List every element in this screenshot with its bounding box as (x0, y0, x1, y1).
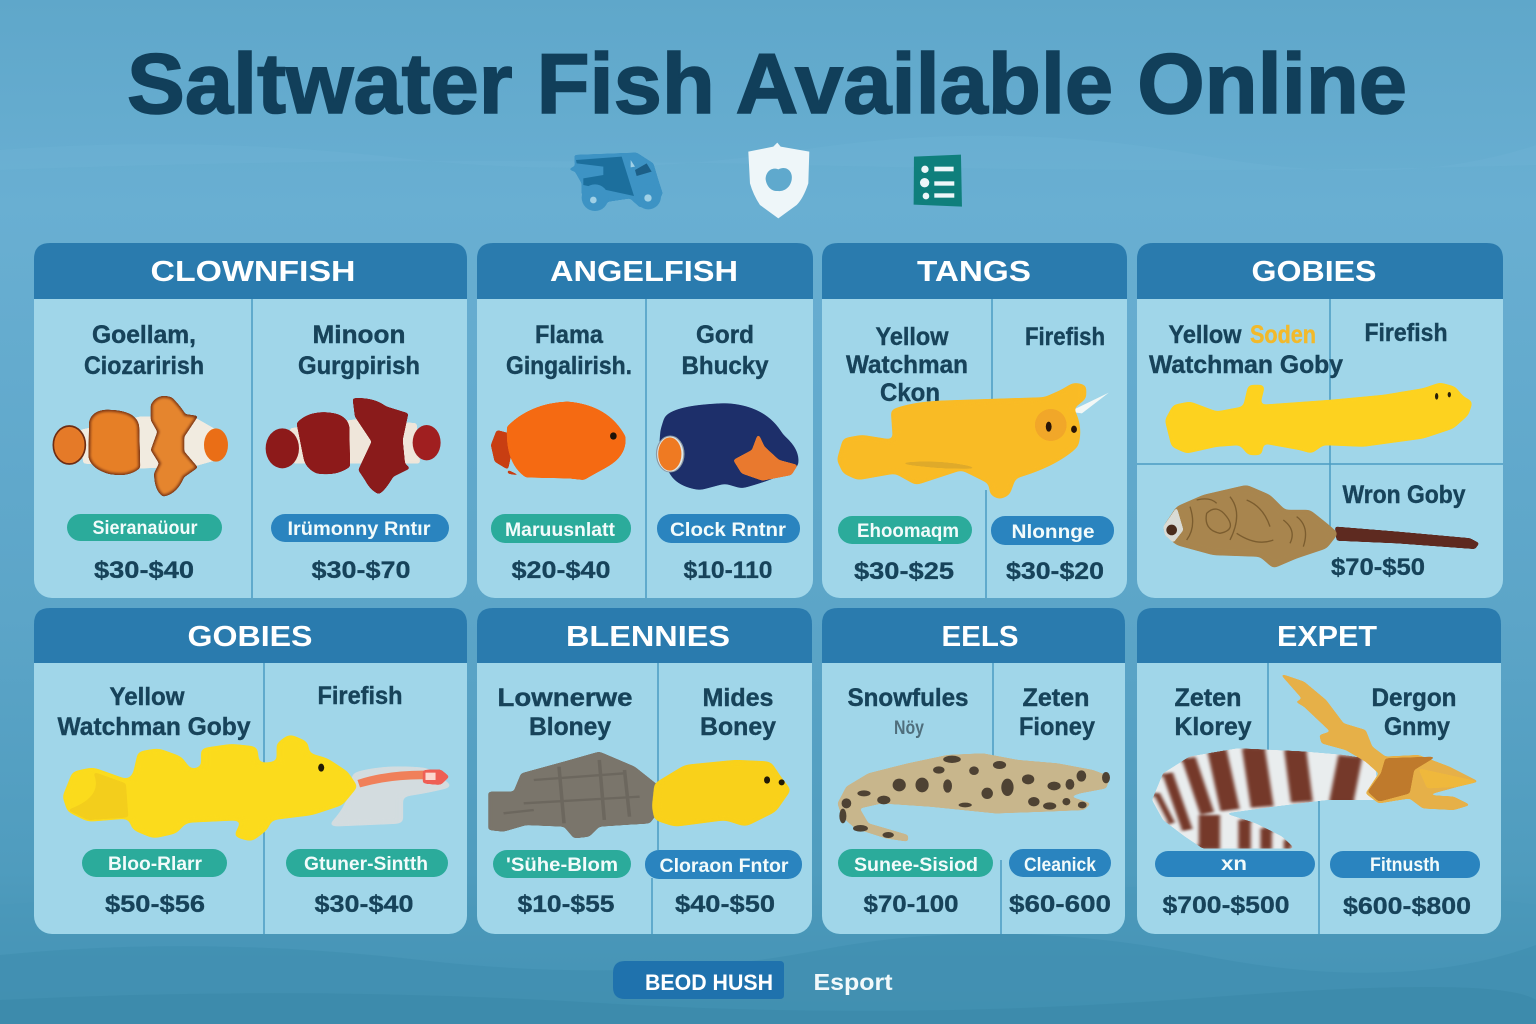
species name: right: Gord (696, 321, 754, 349)
heading: expet: EXPET (1277, 621, 1377, 653)
price: left: $50-$56 (105, 891, 205, 918)
badge: right (1330, 851, 1480, 878)
fish: brown goby (1163, 485, 1479, 568)
badge: left: Sunee-Sisiod (854, 855, 978, 876)
badge: right: Cleanick (1024, 855, 1096, 876)
fish: yellow tang (837, 383, 1109, 499)
price: left: $70-100 (864, 891, 958, 918)
fish: orange clownfish (53, 397, 228, 496)
species name: left: Klorey (1174, 713, 1252, 741)
species name: left (58, 683, 251, 741)
species name: right (700, 684, 776, 741)
species name: left: Zeten (1174, 684, 1242, 712)
heading: angelfish: ANGELFISH (550, 256, 738, 288)
icon: shield with heart (748, 143, 809, 218)
badge: left: xn (1221, 854, 1247, 875)
heading: tangs: TANGS (917, 256, 1031, 288)
species name: left (498, 684, 633, 741)
badge: right (645, 850, 802, 879)
species name: right (1019, 684, 1095, 741)
species name: right: Bhucky (682, 352, 769, 380)
badge: right (286, 849, 448, 877)
species name: left: Flama (535, 321, 604, 349)
panel: gobies top (1137, 243, 1503, 598)
species name: left (848, 684, 968, 739)
species name: left: Gingalirish. (506, 352, 632, 380)
price: right: $40-$50 (675, 891, 775, 918)
species name: right: Boney (700, 713, 776, 741)
species name: yellow watchman goby (1149, 321, 1343, 379)
species name: left: Nöy (894, 718, 924, 739)
badge: right: Cloraon Fntor (660, 856, 789, 877)
heading: gobies: GOBIES (1252, 256, 1376, 288)
icon: delivery truck (568, 153, 663, 211)
species name: right: Fioney (1019, 713, 1095, 741)
species name: right: Mides (702, 684, 774, 712)
species name: right: Zeten (1022, 684, 1090, 712)
species name: right (682, 321, 769, 380)
panel: eels (822, 608, 1125, 934)
heading: blennies: BLENNIES (566, 621, 730, 653)
badge: right (657, 514, 800, 543)
badge: left (67, 514, 222, 541)
fish: navy angelfish (657, 403, 798, 490)
species name: left (506, 321, 632, 380)
badge: right: Clock Rntnr (670, 520, 787, 541)
goby eyes (1435, 392, 1451, 400)
species name: left: Watchman Goby (58, 713, 251, 741)
panel: angelfish (477, 243, 813, 598)
badge: right (1009, 849, 1111, 877)
badge: left: Bloo-Rlarr (108, 854, 203, 875)
fish: zebra eel with dragon head (1152, 673, 1479, 848)
species name: wron goby: Wron Goby (1342, 481, 1466, 509)
price: left: $700-$500 (1162, 892, 1290, 919)
badge: right: Gtuner-Sintth (304, 854, 428, 875)
price: left: $30-$40 (94, 557, 194, 584)
badge: left: Ehoomaqm (857, 521, 959, 542)
price: right: $30-$20 (1006, 558, 1104, 585)
title: Saltwater Fish Available Online (127, 37, 1407, 132)
footer button (613, 961, 784, 999)
price: left: $10-$55 (518, 891, 614, 918)
species name: left: Yellow (110, 683, 185, 711)
species name: left: Yellow (876, 323, 949, 351)
species name: left: Watchman (846, 351, 968, 379)
footer button: BEOD HUSH (645, 970, 773, 995)
fish: grey blenny (488, 752, 667, 838)
fish: yellow watchman goby (63, 734, 357, 842)
badge: left: Sieranaüour (92, 518, 198, 539)
species name: right: Minoon (312, 321, 406, 349)
species name: right: Dergon (1372, 684, 1456, 712)
price: right: $30-$40 (314, 891, 414, 918)
price: right: $60-600 (1009, 891, 1111, 918)
species name: right: Firefish (318, 682, 402, 710)
species name: left: Snowfules (848, 684, 968, 712)
species name: left: Ckon (880, 379, 940, 407)
heading: gobies: GOBIES (188, 621, 312, 653)
panel: clownfish (34, 243, 467, 598)
price: left: $30-$25 (854, 558, 954, 585)
species name: left (846, 323, 968, 407)
species name: yellow watchman goby: Watchman Goby (1149, 351, 1343, 379)
species name: right (298, 321, 420, 380)
species name: left: Ciozarirish (84, 352, 204, 380)
panel: tangs (822, 243, 1127, 598)
badge: left (491, 514, 631, 543)
panel: gobies bottom (34, 608, 467, 934)
species name: right: Gurgpirish (298, 352, 420, 380)
fish: flame angelfish (491, 402, 626, 480)
badge: right (991, 516, 1114, 545)
badge: right: Nlonnge (1012, 522, 1094, 543)
panel: expet (1137, 608, 1501, 934)
species name: left: Goellam, (92, 321, 196, 349)
badge: right (271, 514, 449, 542)
badge: left (838, 849, 993, 877)
badge: right: Irümonny Rntır (288, 519, 431, 540)
heading: clownfish: CLOWNFISH (150, 256, 356, 288)
icon: checklist (914, 155, 962, 207)
species name: left (1174, 684, 1252, 741)
species name: left: Lownerwe (498, 684, 633, 712)
badge: left: Maruusnlatt (505, 520, 616, 541)
fish: snowflake eel (838, 753, 1110, 842)
fish: yellow goby (1165, 383, 1473, 455)
badge: left (82, 849, 227, 877)
species name: firefish: Firefish (1364, 319, 1448, 347)
badge: left (493, 850, 631, 878)
species name: right (1372, 684, 1456, 741)
species name: right: Gnmy (1384, 713, 1450, 741)
price: right: $30-$70 (312, 557, 410, 584)
fish: red clownfish (266, 398, 441, 494)
species name: yellow watchman goby: Soden (1250, 321, 1316, 349)
price: right: $10-110 (684, 557, 772, 584)
species name: right: Firefish (1025, 323, 1105, 351)
panel: blennies (477, 608, 812, 934)
price: left: $20-$40 (512, 557, 610, 584)
price: $70-$50 (1331, 554, 1425, 581)
price: right: $600-$800 (1343, 893, 1471, 920)
badge: left: 'Sühe-Blom (506, 855, 618, 876)
species name: left (84, 321, 204, 380)
species name: yellow watchman goby: Yellow (1168, 321, 1242, 349)
fish: firefish streak (327, 767, 453, 827)
species name: left: Bloney (529, 713, 611, 741)
badge: right: Fitnusth (1370, 855, 1440, 876)
heading: eels: EELS (942, 621, 1018, 653)
footer label: Esport (814, 969, 893, 995)
fish: yellow blenny (652, 760, 791, 827)
badge: left (838, 516, 972, 544)
badge: left (1155, 851, 1315, 877)
